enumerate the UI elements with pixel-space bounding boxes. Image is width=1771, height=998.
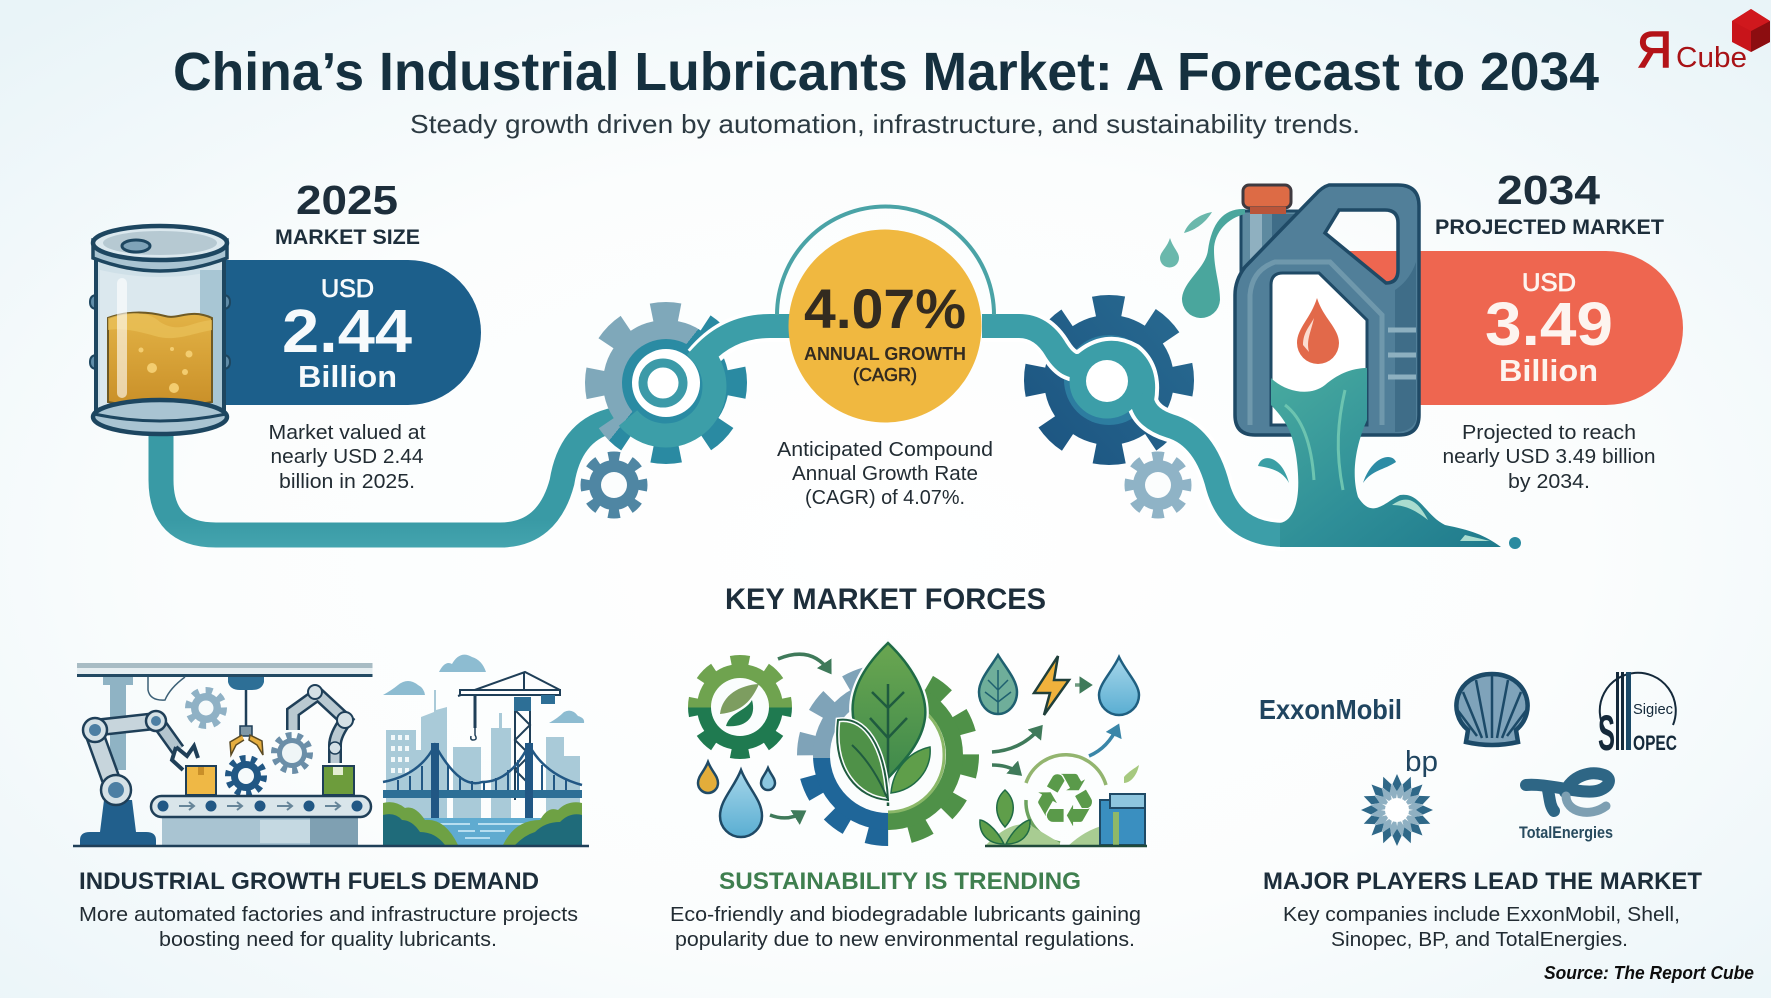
illustration: factory and city	[73, 655, 589, 846]
icon: oil barrel	[90, 226, 230, 434]
value text: 2034: 3.49	[1485, 290, 1613, 358]
panel: 2034 projected market: PROJECTED MARKET	[1435, 216, 1664, 239]
CAGR badge: (CAGR)	[853, 364, 917, 385]
panel text: industrial growth: boosting need for quality lubricants.	[159, 928, 497, 951]
logo: RCube	[1637, 9, 1770, 78]
cable	[148, 677, 185, 700]
value text: 2025: USD	[321, 275, 374, 303]
icon: leaf drop	[979, 655, 1017, 715]
support pillar	[103, 677, 133, 770]
gear: small left	[586, 457, 642, 513]
description: 2025: Market valued at	[268, 422, 426, 444]
ring over pipe	[635, 352, 697, 414]
overhead beam	[77, 663, 372, 677]
logo: Shell	[1456, 674, 1528, 745]
logo: Sinopec: OPEC	[1633, 732, 1677, 755]
logo: bp	[1361, 746, 1438, 846]
city skyline	[386, 690, 580, 845]
panel: 2034 projected market	[1345, 167, 1683, 493]
ground line	[73, 845, 589, 847]
icon: water drop	[1099, 657, 1139, 715]
logo: Sinopec: Sigiec	[1633, 701, 1673, 718]
crane	[458, 672, 560, 800]
CAGR description: (CAGR) of 4.07%.	[805, 487, 965, 509]
growth pipeline	[161, 416, 632, 535]
value text: 2025: 2.44	[282, 297, 412, 365]
pill: 2034 value	[1345, 251, 1683, 405]
value text: 2034: USD	[1522, 269, 1576, 297]
panel text: industrial growth: More automated factories and infrastructure projects	[79, 903, 578, 926]
pill: 2025 value	[200, 260, 481, 405]
recycle icon	[985, 755, 1106, 846]
yellow box	[186, 766, 216, 795]
heading: key market forces: KEY MARKET FORCES	[725, 583, 1046, 616]
conveyor belt	[151, 796, 371, 845]
gripper	[228, 677, 264, 755]
logo: bp: bp	[1405, 746, 1438, 778]
description: 2034: nearly USD 3.49 billion	[1442, 446, 1656, 468]
arrow	[992, 727, 1041, 752]
value text: 2034	[1485, 269, 1613, 388]
panel text: major players: MAJOR PLAYERS LEAD THE MARKET	[1263, 868, 1702, 895]
icon: spilling liquid	[1160, 209, 1521, 549]
logo: TotalEnergies: TotalEnergies	[1519, 824, 1613, 842]
description: 2025: billion in 2025.	[279, 471, 415, 493]
logo: Sinopec: S	[1598, 705, 1615, 761]
ground line	[985, 845, 1147, 847]
arrow	[1089, 726, 1118, 756]
description: 2034	[1442, 422, 1656, 493]
green box	[323, 766, 354, 795]
CAGR description	[777, 439, 993, 509]
CAGR badge: 4.07%	[804, 277, 966, 340]
logo: TotalEnergies	[1519, 773, 1613, 842]
CAGR description: Annual Growth Rate	[792, 463, 978, 485]
gear: right large	[1035, 306, 1183, 454]
arrow	[778, 654, 830, 672]
pipe: CAGR to right gear	[982, 326, 1285, 535]
arrow	[770, 812, 804, 818]
title: China’s Industrial Lubricants Market: A Forecast to 2034	[173, 42, 1599, 102]
panel text: sustainability	[670, 868, 1141, 951]
gear: mid	[275, 736, 309, 770]
CAGR badge: ANNUAL GROWTH	[804, 343, 966, 364]
subtitle: Steady growth driven by automation, infrastructure, and sustainability trends.	[410, 109, 1360, 139]
drops	[698, 762, 775, 837]
panel text: major players: Key companies include ExxonMobil, Shell,	[1283, 903, 1680, 926]
inner ring: left gear	[643, 363, 683, 403]
panel text: major players	[1263, 868, 1702, 951]
panel text: industrial growth: INDUSTRIAL GROWTH FUELS DEMAND	[79, 868, 539, 895]
logo: Sinopec	[1598, 672, 1677, 761]
description: 2025	[268, 422, 426, 493]
panel text: industrial growth	[79, 868, 578, 951]
ring: right gear centre	[1078, 352, 1136, 410]
water	[420, 818, 550, 845]
value text: 2025: Billion	[298, 359, 397, 394]
logo: RCube: Я	[1637, 21, 1672, 78]
illustration: sustainability	[694, 643, 1147, 846]
robot arm left	[80, 711, 198, 846]
icon: lightning bolt	[1034, 656, 1069, 715]
large gear with leaf	[806, 643, 970, 837]
clouds	[383, 655, 584, 723]
arrow	[1075, 683, 1090, 687]
hills	[383, 802, 582, 845]
CAGR badge	[777, 207, 994, 422]
description: 2034: Projected to reach	[1462, 422, 1636, 444]
panel: 2034 projected market: 2034	[1497, 167, 1600, 213]
icon: bottles	[1100, 765, 1145, 845]
recycle icon: ♻	[1032, 758, 1098, 844]
CAGR description: Anticipated Compound	[777, 439, 993, 461]
panel text: sustainability: Eco-friendly and biodegradable lubricants gaining	[670, 903, 1141, 926]
description: 2034: by 2034.	[1508, 471, 1590, 493]
description: 2025: nearly USD 2.44	[270, 446, 424, 468]
pipe: left gear to CAGR	[700, 326, 800, 360]
panel text: sustainability: popularity due to new environmental regulations.	[675, 928, 1135, 951]
bridge	[383, 743, 582, 828]
arrow	[992, 765, 1020, 774]
logo: ExxonMobil: ExxonMobil	[1259, 694, 1402, 725]
robot arm right	[293, 685, 353, 763]
gear: green small	[694, 661, 786, 753]
logo: RCube: Cube	[1676, 42, 1747, 74]
value text: 2034: Billion	[1499, 353, 1598, 388]
gear: top	[189, 691, 223, 725]
panel: 2025 market size: MARKET SIZE	[275, 226, 420, 249]
panel text: major players: Sinopec, BP, and TotalEnergies.	[1331, 928, 1628, 951]
icon: oil jug	[1235, 185, 1419, 435]
panel: 2025 market size	[200, 177, 481, 493]
gear: small right	[1130, 457, 1186, 513]
gear: navy	[229, 759, 263, 793]
value text: 2025	[282, 275, 412, 394]
icon: plant	[980, 790, 1030, 844]
source note: Source: The Report Cube	[1544, 963, 1754, 983]
gear: left large	[595, 312, 737, 454]
panel: 2025 market size: 2025	[296, 177, 398, 223]
panel text: sustainability: SUSTAINABILITY IS TRENDING	[719, 868, 1081, 895]
